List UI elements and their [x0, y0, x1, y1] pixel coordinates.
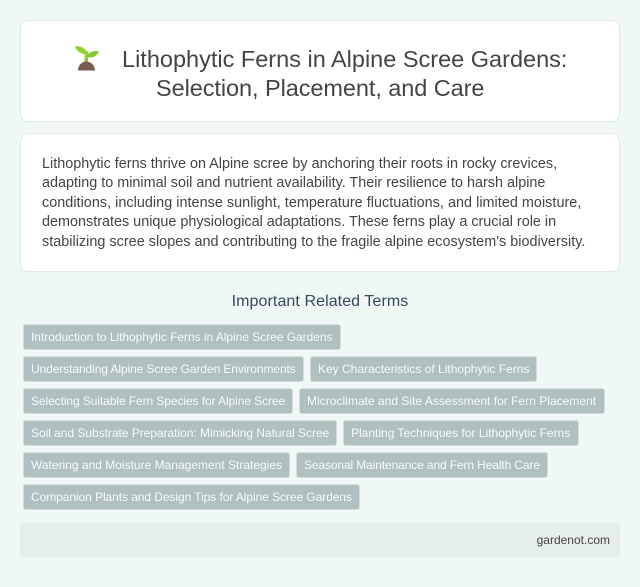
tag [343, 420, 579, 446]
text block: introduction: adapting to minimal soil and nutrient availability. Their resilience to harsh alpine [42, 175, 545, 191]
title [122, 46, 567, 101]
panel: tag list [23, 324, 605, 510]
tag [23, 452, 290, 478]
tag: Understanding Alpine Scree Garden Environments [31, 362, 296, 376]
panel: title card [20, 20, 620, 122]
tag: Introduction to Lithophytic Ferns in Alpine Scree Gardens [31, 330, 333, 344]
tag [23, 420, 337, 446]
icon: seedling [75, 46, 99, 70]
tag [23, 356, 304, 382]
tag: Seasonal Maintenance and Fern Health Care [304, 458, 540, 472]
tag [23, 484, 360, 510]
tag: Watering and Moisture Management Strategies [31, 458, 282, 472]
text block: introduction: demonstrates unique physiological adaptations. These ferns play a crucial role in [42, 214, 556, 230]
tag [296, 452, 548, 478]
text block: introduction: stabilizing scree slopes and contributing to the fragile alpine ecosystem's biodiversity. [42, 234, 585, 250]
text block: introduction: conditions, including intense sunlight, temperature fluctuations, and limited moisture, [42, 195, 581, 211]
tag [23, 324, 341, 350]
tag: Selecting Suitable Fern Species for Alpine Scree [31, 394, 285, 408]
title: Selection, Placement, and Care [156, 75, 484, 101]
panel: intro text card [20, 133, 620, 272]
tag: Key Characteristics of Lithophytic Ferns [318, 362, 529, 376]
tag: Soil and Substrate Preparation: Mimicking Natural Scree [31, 426, 329, 440]
tag [299, 388, 605, 414]
tag: Planting Techniques for Lithophytic Ferns [351, 426, 570, 440]
text block: introduction: Lithophytic ferns thrive on Alpine scree by anchoring their roots in rocky crevices, [42, 156, 557, 172]
footer [20, 523, 620, 557]
footer text: gardenot.com [537, 533, 610, 547]
tag: Companion Plants and Design Tips for Alpine Scree Gardens [31, 490, 352, 504]
heading: related terms: Important Related Terms [232, 293, 408, 310]
tag: Microclimate and Site Assessment for Fern Placement [307, 394, 596, 408]
title: Lithophytic Ferns in Alpine Scree Gardens: [122, 46, 567, 72]
text block: introduction [42, 156, 585, 250]
tag [23, 388, 293, 414]
tag [310, 356, 537, 382]
